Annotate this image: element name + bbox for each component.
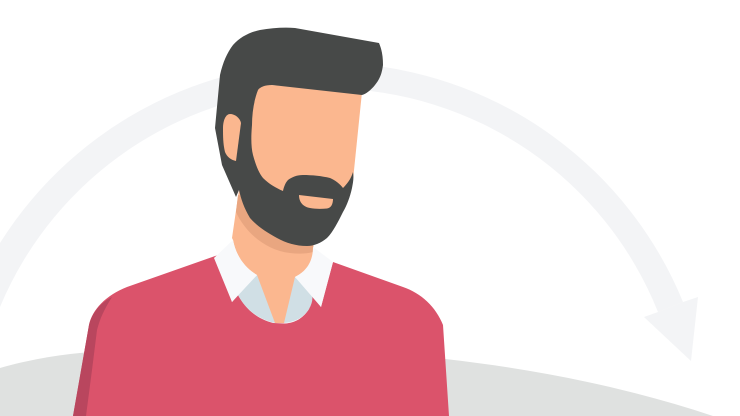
- curved arrow: [0, 63, 698, 361]
- man figure: [73, 28, 449, 416]
- face: [242, 84, 362, 200]
- right collar: [295, 247, 333, 307]
- hair and beard: [215, 28, 383, 246]
- left collar: [214, 240, 257, 302]
- mouth: [299, 195, 333, 209]
- neck shadow: [236, 195, 314, 254]
- sweater: [73, 255, 449, 416]
- ground curve: [0, 347, 713, 416]
- shirt inner: [238, 275, 312, 323]
- neck: [232, 190, 314, 323]
- ear: [223, 114, 241, 161]
- sweater shoulder shadow: [73, 297, 112, 416]
